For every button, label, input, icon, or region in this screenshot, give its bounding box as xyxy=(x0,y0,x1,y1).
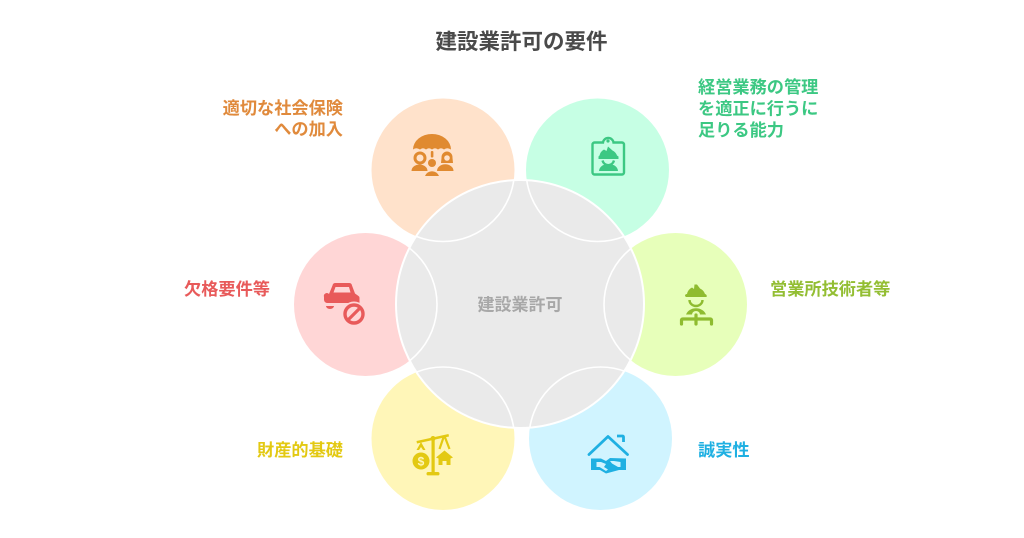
label: social insurance: 適切な社会保険 xyxy=(223,98,343,118)
petal: disqualification xyxy=(294,233,437,376)
label: engineer: 営業所技術者等 xyxy=(770,279,890,299)
icon: scale with coin and house: $ xyxy=(418,454,425,468)
label: sincerity: 誠実性 xyxy=(698,440,750,460)
petal: social insurance xyxy=(372,98,514,242)
petal: sincerity xyxy=(529,367,672,510)
label: management: 足りる能力 xyxy=(698,120,784,140)
label: financial base: 財産的基礎 xyxy=(257,440,343,460)
icon: engineer with pipe xyxy=(682,284,712,324)
label: management: を適正に行うに xyxy=(698,98,818,118)
label: disqualification: 欠格要件等 xyxy=(184,279,270,299)
petal outlines over center xyxy=(410,181,630,427)
petal: engineer xyxy=(604,233,747,376)
icon: scale with coin and house xyxy=(412,434,453,475)
icon: house with handshake xyxy=(589,436,628,474)
label: social insurance: への加入 xyxy=(274,119,343,139)
center circle xyxy=(396,180,644,428)
petal: management xyxy=(526,98,669,242)
center label: 建設業許可 xyxy=(478,294,562,314)
title: 建設業許可の要件 xyxy=(435,30,608,54)
label: management: 経営業務の管理 xyxy=(698,77,818,97)
icon: umbrella and people xyxy=(412,134,454,176)
icon: car with prohibition sign xyxy=(324,283,366,326)
icon: clipboard with worker xyxy=(592,138,624,174)
petal: financial base xyxy=(372,367,514,510)
